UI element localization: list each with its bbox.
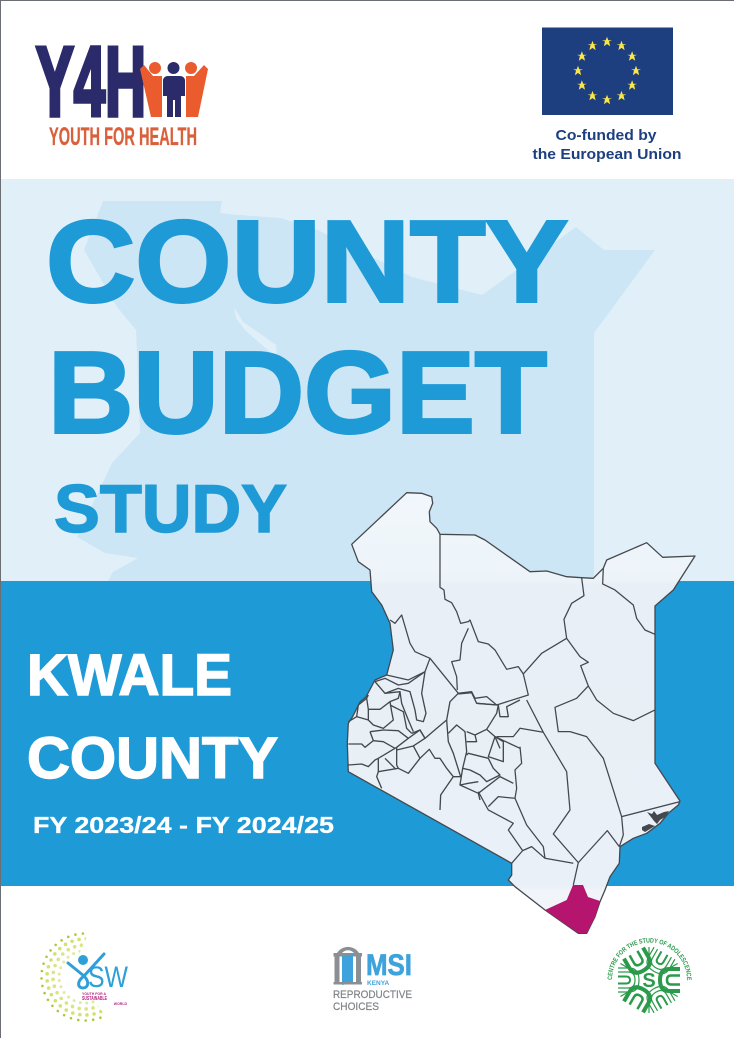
highlighted Kwale County <box>545 885 600 933</box>
map of Kenya counties <box>347 493 695 933</box>
EU co-funded caption: the European Union <box>532 146 682 163</box>
background map silhouette of Kenya <box>77 201 655 581</box>
radial emblem <box>618 947 680 1013</box>
title: COUNTY: COUNTY <box>46 196 568 326</box>
light blue title panel <box>0 179 734 581</box>
Y4H wordmark: Y4H <box>36 26 146 136</box>
logo: Youth for Health <box>36 26 208 151</box>
tagline <box>82 992 127 1006</box>
Lamu islands <box>642 811 669 832</box>
tagline: WORLD <box>114 1002 127 1006</box>
tagline: YOUTH FOR A <box>82 992 106 996</box>
Reproductive Choices <box>333 989 412 1013</box>
dotted halo <box>40 932 103 1022</box>
icon: three youth figures <box>140 62 208 117</box>
logo: Youth for a Sustainable World <box>42 934 129 1020</box>
logo: MSI Kenya <box>333 947 412 1013</box>
EU co-funded caption: Co-funded by <box>556 127 657 144</box>
title: STUDY: STUDY <box>54 471 287 547</box>
logo: Centre for the Study of Adolescence <box>608 938 692 1014</box>
Kenya outline <box>347 493 695 933</box>
tagline: SUSTAINABLE <box>82 996 107 1002</box>
blue county band <box>0 581 734 886</box>
county borders north and east <box>387 534 680 885</box>
county borders western cluster <box>348 672 520 810</box>
EU co-funded caption <box>532 127 682 163</box>
title: BUDGET: BUDGET <box>48 328 547 458</box>
centre S: S <box>642 970 656 992</box>
MSI wordmark: MSI <box>366 949 412 982</box>
curved name: CENTRE FOR THE STUDY OF ADOLESCENCE <box>608 938 692 980</box>
tagline: YOUTH FOR HEALTH <box>49 123 197 151</box>
Reproductive Choices: CHOICES <box>333 1001 379 1013</box>
county name: KWALE: KWALE <box>27 643 232 708</box>
fiscal years: FY 2023/24 - FY 2024/25 <box>33 812 334 838</box>
county name: COUNTY: COUNTY <box>27 726 278 791</box>
logo: EU flag <box>542 28 673 115</box>
Reproductive Choices: REPRODUCTIVE <box>333 989 412 1001</box>
door icon <box>334 947 362 985</box>
SW letters: SW <box>88 961 129 994</box>
figure icon <box>78 955 88 965</box>
ring of stars <box>573 37 641 104</box>
Kenya label: KENYA <box>367 980 389 987</box>
